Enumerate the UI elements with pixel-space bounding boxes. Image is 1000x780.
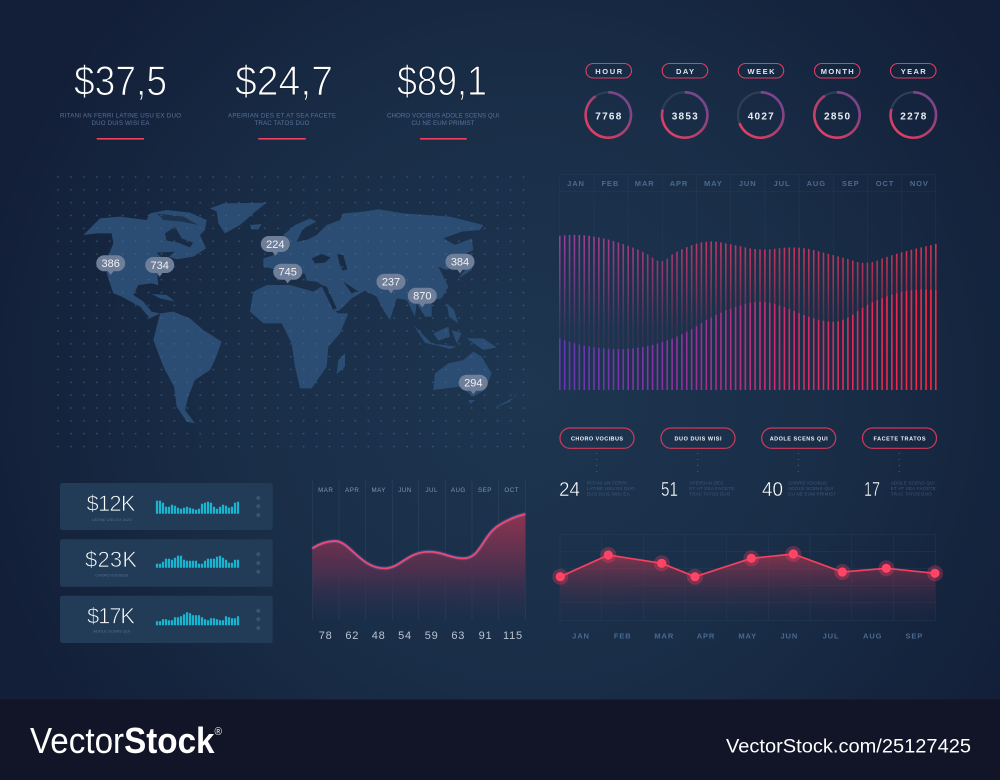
pin: 734: 734 [151, 260, 169, 272]
pin: 224 [261, 236, 290, 256]
ring: year: YEAR [901, 67, 926, 76]
area chart month labels: JUN [398, 487, 412, 494]
figure: $37,5 [60, 57, 181, 140]
figure: $89,1 [387, 57, 499, 140]
pin: 294: 294 [464, 378, 482, 390]
stat: choro vocibus: 24 [559, 479, 580, 501]
line chart month labels: JUL [823, 632, 839, 640]
panel: area chart [312, 480, 525, 642]
ring: hour [586, 64, 632, 138]
pin: 294 [459, 375, 488, 394]
area chart month labels: JUL [425, 487, 438, 494]
pin: 384 [446, 254, 474, 273]
pin: 870: 870 [413, 291, 431, 303]
area chart month labels: MAR [318, 487, 333, 494]
area chart values: 115 [503, 630, 523, 642]
month labels: SEP [842, 179, 860, 188]
panel: summary cards [60, 483, 273, 643]
upper wave bars [559, 234, 937, 349]
stat: duo duis wisi: 51 [661, 479, 678, 501]
area chart month labels: AUG [451, 487, 466, 494]
month labels: JUL [774, 179, 790, 188]
stat: facete tratos: 17 [864, 479, 880, 501]
area chart month labels: APR [345, 487, 359, 494]
stat: facete tratos: FACETE TRATOS [874, 436, 926, 442]
card: $17K [60, 596, 273, 643]
panel: world map [52, 171, 528, 453]
figure: $89,1: CHORO VOCIBUS ADOLE SCENS QUI [387, 112, 499, 120]
chart grid [560, 174, 936, 390]
area chart values [319, 630, 523, 642]
stat: choro vocibus [559, 428, 635, 501]
area chart values: 54 [398, 630, 412, 642]
panel: monthly comb chart [559, 174, 937, 390]
stat: adole scens qui [762, 428, 836, 501]
pin: 745 [273, 264, 302, 283]
figure: $89,1: $89,1 [397, 57, 487, 104]
ring: month [814, 64, 860, 138]
stat: adole scens qui: 40 [762, 479, 783, 501]
stat: facete tratos: ET AT SEA FACETE [891, 486, 936, 491]
figure: $89,1: CU NE EUM PRIMIST [412, 120, 475, 127]
ring: week: WEEK [748, 67, 775, 76]
pin: 745: 745 [279, 267, 297, 279]
area chart values: 48 [372, 630, 386, 642]
ring: day: 3853 [672, 112, 698, 123]
area chart values: 62 [345, 630, 359, 642]
stat: duo duis wisi: DUO DUIS WISI [674, 436, 722, 442]
pin: 386: 386 [102, 258, 120, 270]
ring: week: 4027 [748, 112, 774, 123]
line chart month labels: JAN [572, 632, 590, 640]
area chart month labels: SEP [478, 487, 492, 494]
map: continents [70, 203, 517, 423]
figure: $37,5: DUO DUIS WISI EA [92, 120, 150, 127]
month labels: JAN [567, 179, 585, 188]
pin: 386 [96, 255, 125, 275]
pin: 237 [376, 274, 406, 293]
ring: week [738, 64, 784, 138]
footer url: VectorStock.com/25127425 [726, 736, 971, 758]
area chart month labels [318, 487, 519, 494]
pin: 384: 384 [451, 257, 469, 269]
ring: hour: 7768 [595, 112, 622, 123]
card: $12K: $12K [86, 491, 136, 516]
figure: $37,5: RITANI AN FERRI LATINE USU EX DUO [60, 112, 181, 120]
line chart points [552, 546, 943, 585]
month labels [567, 179, 929, 188]
card: $12K [60, 483, 273, 530]
stat: duo duis wisi: APEIRIAN DES [689, 480, 723, 485]
line chart grid [560, 534, 936, 621]
ring: day [662, 64, 708, 138]
area chart month labels: OCT [504, 487, 519, 494]
figure: $24,7: $24,7 [235, 57, 333, 104]
stat: facete tratos: ADOLE SCENS QUI [891, 480, 935, 485]
area chart values: 91 [479, 630, 492, 642]
stat: choro vocibus: CHORO VOCIBUS [571, 436, 623, 442]
ring: year [890, 64, 936, 138]
line chart month labels: FEB [614, 632, 632, 640]
area chart month labels: MAY [371, 487, 386, 494]
panel: time period rings [586, 64, 936, 138]
stat: adole scens qui: CU NE EUM PRIMIST [788, 492, 836, 497]
stat: duo duis wisi: ET AT SEA FACETE [689, 486, 734, 491]
map: inland seas [157, 213, 455, 309]
month labels: MAR [635, 179, 655, 188]
ring: day: DAY [676, 67, 694, 76]
month labels: FEB [601, 179, 619, 188]
panel: line chart [552, 534, 943, 640]
area chart grid [312, 480, 525, 620]
card: $17K: ADOLE SCENS QUI [93, 628, 130, 633]
card: $17K: $17K [87, 603, 135, 628]
pin: 870 [408, 288, 437, 307]
line chart area [560, 554, 935, 620]
map: dot grid [52, 171, 528, 453]
area chart fill and curve [312, 514, 525, 620]
month labels: OCT [876, 179, 894, 188]
panel: headline figures [60, 57, 499, 140]
stat: duo duis wisi [661, 428, 735, 501]
stat: facete tratos: TRAC TATOS DUO [891, 492, 932, 497]
stat: choro vocibus: DUO DUIS WISI EA [587, 492, 631, 497]
footer logo: ® [215, 726, 222, 738]
panel: category pills and stats [559, 428, 936, 501]
stat: duo duis wisi: TRAC TATOS DUO [689, 492, 731, 497]
line chart month labels: JUN [780, 632, 798, 640]
ring: month: 2850 [824, 112, 850, 123]
month labels: AUG [807, 179, 826, 188]
line chart month labels: AUG [863, 632, 882, 640]
line chart month labels: APR [697, 632, 715, 640]
card: $12K: LATINE USU EX DUO [92, 517, 132, 522]
stat: facete tratos [862, 428, 936, 501]
month labels: JUN [739, 179, 757, 188]
ring: year: 2278 [900, 112, 927, 123]
stat: adole scens qui: CHORO VOCIBUS [788, 480, 827, 485]
stat: choro vocibus: RITANI AN FERRI [587, 480, 627, 485]
line chart month labels [572, 632, 923, 640]
figure: $37,5: $37,5 [74, 57, 167, 104]
figure: $24,7: TRAC TATOS DUO [254, 120, 310, 127]
area chart values: 63 [451, 630, 465, 642]
stat: adole scens qui: ADOLE SCENS QUI [770, 436, 828, 442]
pin: 734 [145, 257, 174, 277]
card: $23K [60, 539, 273, 587]
lower wave bars [559, 289, 937, 390]
footer band [0, 700, 1000, 780]
month labels: NOV [910, 179, 929, 188]
month labels: MAY [704, 179, 723, 188]
pin: 224: 224 [266, 239, 284, 251]
area chart values: 78 [319, 630, 333, 642]
area chart values: 59 [425, 630, 439, 642]
stat: choro vocibus: LATINE USU EX DUO [587, 486, 635, 491]
figure: $24,7 [228, 57, 336, 140]
card: $23K: CHORO VOCIBUS [95, 572, 129, 577]
stat: adole scens qui: ADOLE SCENS QUI [788, 486, 833, 491]
ring: hour: HOUR [595, 67, 623, 76]
pin: 237: 237 [382, 277, 400, 289]
line chart month labels: SEP [905, 632, 923, 640]
footer logo: VectorStock [30, 720, 222, 761]
line chart month labels: MAY [738, 632, 757, 640]
figure: $24,7: APEIRIAN DES ET AT SEA FACETE [228, 112, 336, 120]
line chart stroke [560, 554, 935, 577]
ring: month: MONTH [821, 67, 854, 76]
line chart month labels: MAR [654, 632, 674, 640]
month labels: APR [670, 179, 688, 188]
card: $23K: $23K [85, 547, 137, 572]
